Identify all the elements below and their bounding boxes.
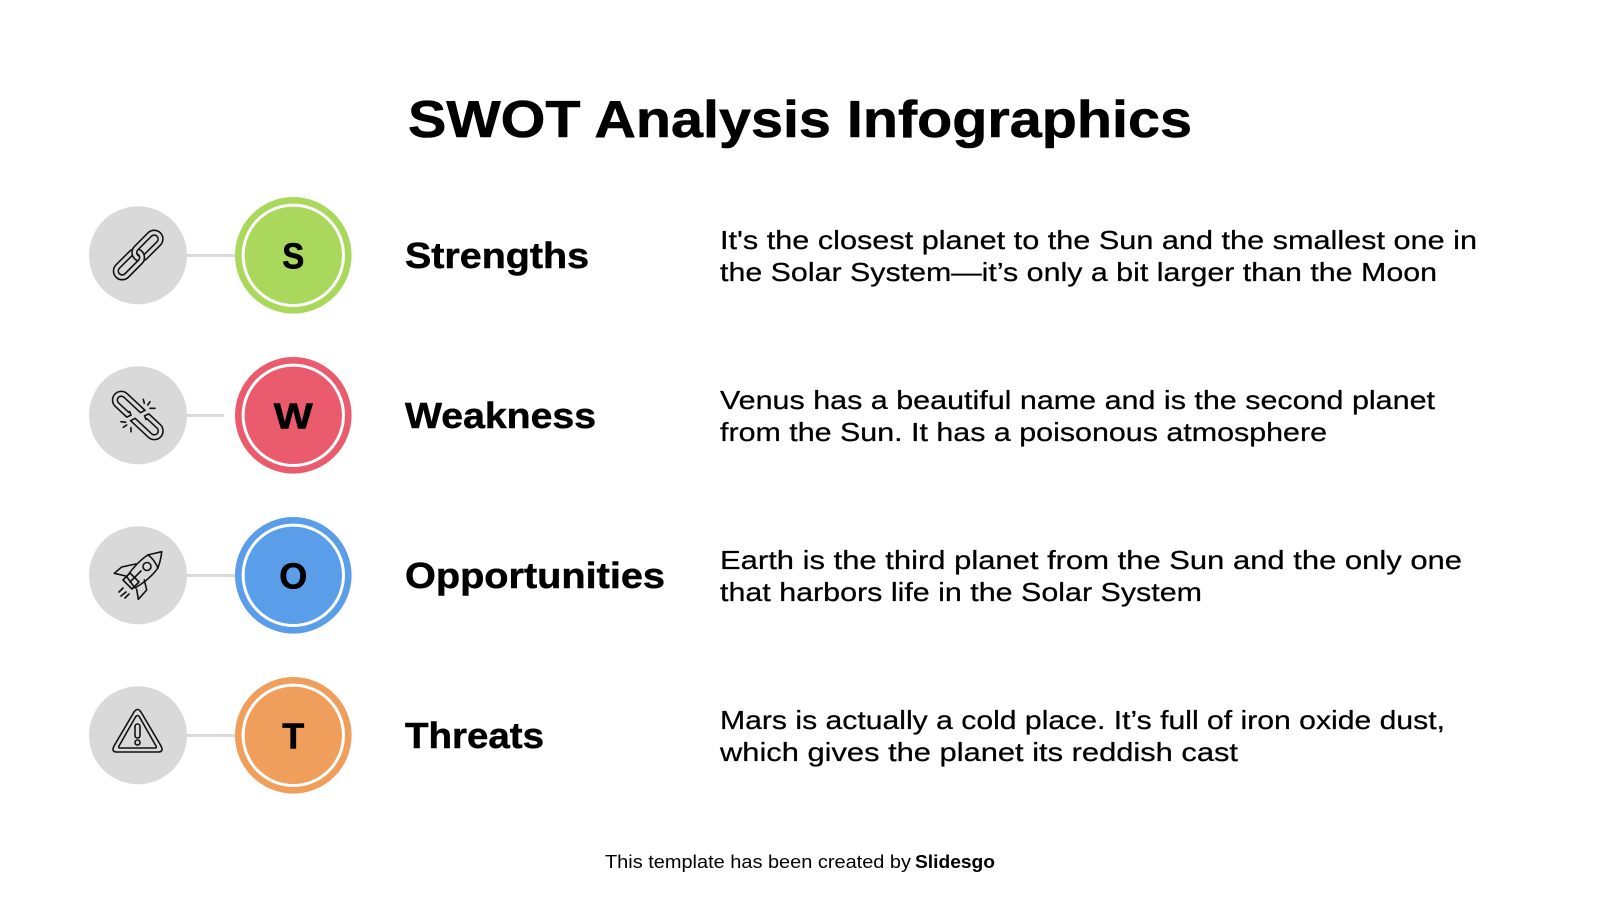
heading: opportunities: Opportunities — [405, 555, 665, 596]
description: strengths: It's the closest planet to the Sun and the smallest one in — [720, 225, 1477, 255]
row: opportunities — [89, 517, 1462, 634]
letter badge: S — [235, 197, 352, 314]
heading: weakness: Weakness — [405, 395, 596, 436]
connector: threats — [187, 734, 235, 737]
description: opportunities: Earth is the third planet from the Sun and the only one — [720, 545, 1462, 575]
title: SWOT Analysis Infographics — [408, 91, 1192, 149]
description: threats: which gives the planet its reddish cast — [719, 737, 1239, 767]
icon circle: rocket — [89, 526, 187, 624]
letter badge: T: T — [282, 716, 304, 756]
connector: opportunities — [187, 574, 235, 577]
description: weakness — [720, 385, 1436, 447]
connector: strengths — [187, 254, 235, 257]
description: strengths — [720, 225, 1477, 287]
heading: threats: Threats — [405, 715, 544, 756]
letter badge: T — [235, 677, 352, 794]
letter badge: W: W — [274, 396, 313, 436]
letter badge: O: O — [279, 556, 307, 596]
icon circle: chain link — [89, 206, 187, 304]
description: strengths: the Solar System—it’s only a bit larger than the Moon — [720, 257, 1437, 287]
description: opportunities — [720, 545, 1462, 607]
row: threats — [89, 677, 1445, 794]
description: weakness: Venus has a beautiful name and is the second planet — [720, 385, 1436, 415]
connector: weakness — [187, 414, 224, 417]
description: threats — [719, 705, 1445, 767]
description: weakness: from the Sun. It has a poisonous atmosphere — [720, 417, 1327, 447]
description: opportunities: that harbors life in the Solar System — [720, 577, 1202, 607]
letter badge: O — [235, 517, 352, 634]
description: threats: Mars is actually a cold place. It’s full of iron oxide dust, — [720, 705, 1445, 735]
footer credit: This template has been created by — [605, 852, 911, 872]
row: strengths — [89, 197, 1477, 314]
footer credit: Slidesgo — [915, 852, 995, 872]
icon circle: warning triangle — [89, 686, 187, 784]
letter badge: W — [235, 357, 352, 474]
heading: strengths: Strengths — [405, 235, 589, 276]
letter badge: S: S — [282, 236, 304, 276]
icon circle: broken chain link — [89, 366, 187, 464]
row: weakness — [89, 357, 1436, 474]
